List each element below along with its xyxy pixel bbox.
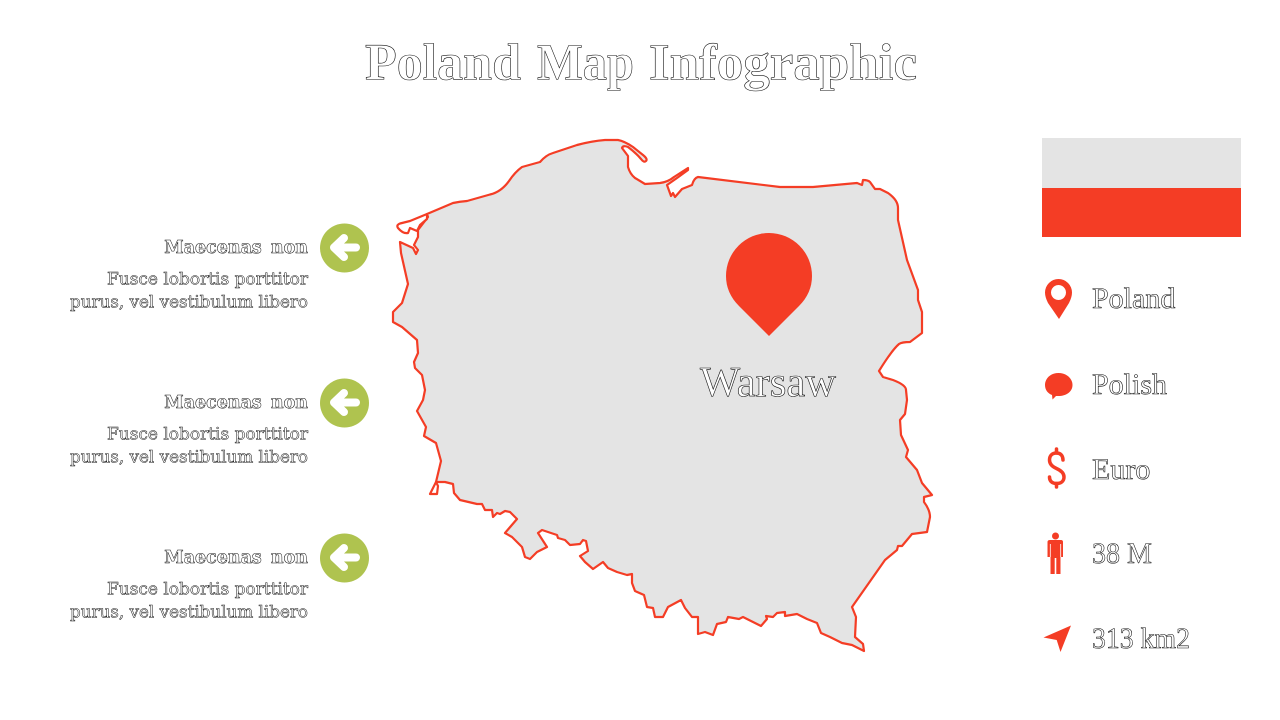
icon: dollar sign — [1050, 449, 1064, 487]
icon: speech bubble — [1045, 373, 1072, 400]
callout 3 — [70, 534, 369, 622]
callout 1 body: Fusce lobortis porttitor — [107, 268, 309, 288]
callout 3 heading: Maecenas non — [164, 548, 308, 568]
callout 2 heading: Maecenas non — [164, 393, 308, 413]
callout 2 body — [70, 424, 309, 466]
label: 38 M: 38 M — [1092, 537, 1152, 570]
callout 1 body — [70, 268, 309, 312]
label: Warsaw: Warsaw — [700, 360, 837, 406]
callout 3 body: Fusce lobortis porttitor — [107, 578, 309, 598]
icon: location pin — [1045, 279, 1072, 319]
title — [365, 34, 917, 92]
label: Euro: Euro — [1092, 453, 1150, 486]
label: Polish: Polish — [1092, 368, 1167, 401]
callout 1 heading: Maecenas non — [164, 238, 308, 258]
icon: arrow circle 1 — [320, 224, 369, 272]
icon: Warsaw map pin — [726, 233, 812, 336]
callout 1 — [70, 224, 369, 312]
icon: arrow circle 2 — [320, 378, 369, 428]
callout 2 — [70, 378, 369, 466]
icon: arrow circle 3 — [320, 534, 369, 582]
map of Poland — [393, 140, 932, 651]
callout 3 body — [70, 578, 309, 622]
title: Infographic — [649, 34, 917, 92]
callout 3 body: purus, vel vestibulum libero — [70, 602, 308, 622]
icon: navigation arrow — [1044, 626, 1071, 652]
callout 1 body: purus, vel vestibulum libero — [70, 292, 308, 312]
flag of Poland — [1042, 138, 1241, 237]
icon: person — [1048, 532, 1063, 574]
label: 313 km2: 313 km2 — [1092, 622, 1190, 655]
label: Poland: Poland — [1092, 282, 1175, 315]
callout 2 body: Fusce lobortis porttitor — [107, 424, 309, 444]
title: Map — [537, 34, 634, 92]
callout 2 body: purus, vel vestibulum libero — [70, 446, 308, 466]
title: Poland — [365, 34, 521, 92]
